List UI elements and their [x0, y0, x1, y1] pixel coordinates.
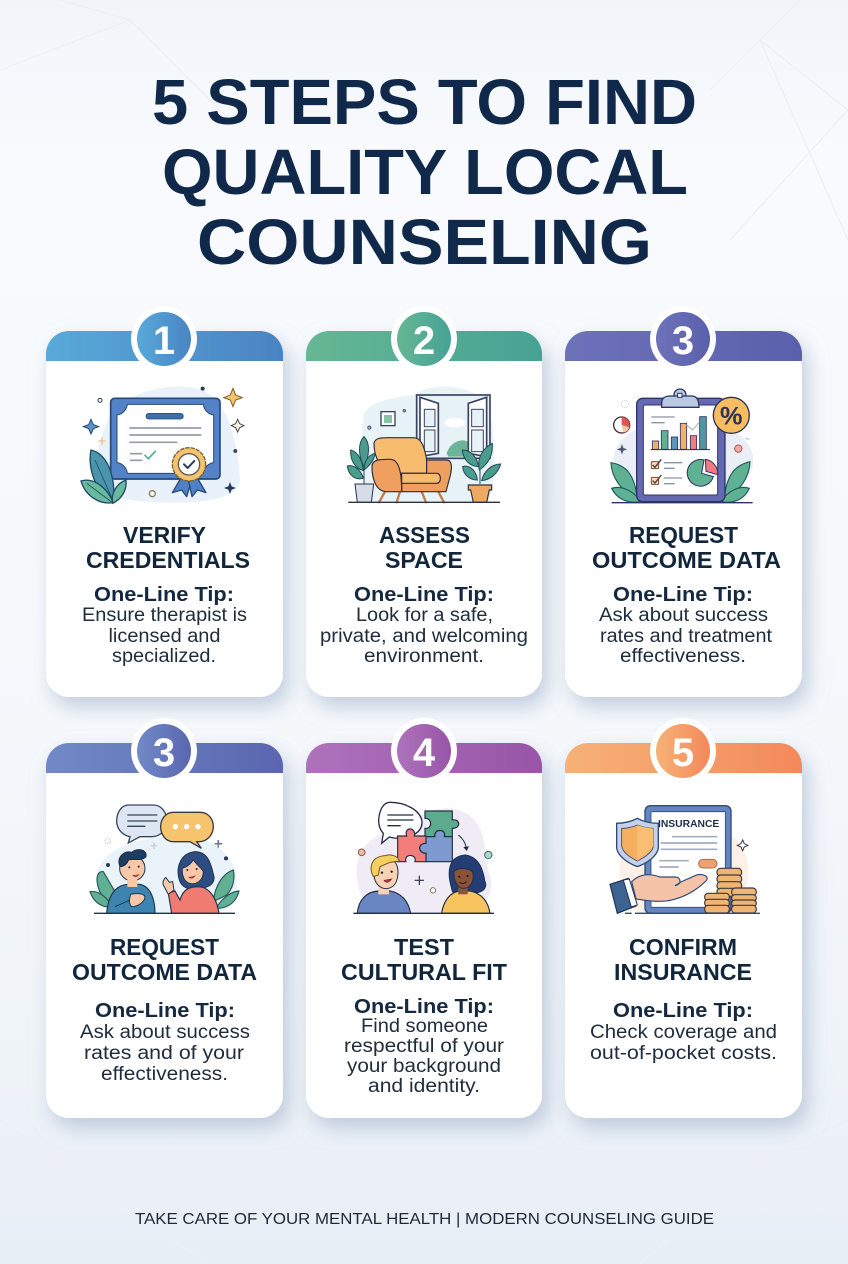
- tip text: out-of-pocket costs.: [590, 1043, 777, 1064]
- title: [152, 66, 697, 278]
- heading: [379, 522, 470, 573]
- heading: CREDENTIALS: [86, 547, 250, 573]
- tip text: Ask about success: [599, 605, 768, 626]
- icon: insurance document: [610, 806, 760, 913]
- tip text: [599, 584, 773, 667]
- number badge 2: [391, 306, 457, 372]
- title: 5 STEPS TO FIND: [152, 66, 697, 138]
- number badge 4: 4: [413, 731, 436, 775]
- heading: REQUEST: [629, 522, 738, 548]
- tip text: Find someone: [361, 1016, 488, 1037]
- heading: [86, 522, 250, 573]
- tip text: Look for a safe,: [356, 605, 493, 626]
- panel: step 1 verify credentials: [46, 306, 283, 697]
- number badge 3: [131, 718, 197, 784]
- tip text: respectful of your: [344, 1036, 505, 1057]
- number badge 4: [391, 718, 457, 784]
- footer text: TAKE CARE OF YOUR MENTAL HEALTH | MODERN COUNSELING GUIDE: [135, 1211, 714, 1228]
- heading: [341, 934, 507, 985]
- tip text: One-Line Tip:: [354, 996, 494, 1018]
- heading: OUTCOME DATA: [72, 959, 257, 985]
- icon: armchair room: [347, 386, 501, 502]
- tip text: Ask about success: [80, 1022, 250, 1043]
- card header: [565, 743, 802, 773]
- panel: step 5 confirm insurance: [565, 718, 802, 1118]
- number badge 5: [650, 718, 716, 784]
- heading: VERIFY: [123, 522, 206, 548]
- tip text: Ensure therapist is: [82, 605, 247, 626]
- tip text: private, and welcoming: [320, 626, 528, 647]
- tip text: One-Line Tip:: [94, 584, 234, 606]
- icon: two people talking: [90, 805, 239, 913]
- icon: insurance document: INSURANCE: [658, 819, 719, 830]
- tip text: [320, 584, 528, 667]
- heading: INSURANCE: [614, 959, 752, 985]
- card body: [46, 331, 283, 697]
- heading: SPACE: [385, 547, 463, 573]
- heading: TEST: [394, 934, 454, 960]
- tip text: licensed and: [108, 626, 220, 647]
- card body: [565, 331, 802, 697]
- card header: [46, 331, 283, 361]
- card body: [306, 331, 542, 697]
- card body: [46, 743, 283, 1118]
- heading: [72, 934, 257, 985]
- card header: [306, 743, 542, 773]
- number badge 3: [650, 306, 716, 372]
- tip text: One-Line Tip:: [613, 1000, 753, 1022]
- heading: CULTURAL FIT: [341, 959, 507, 985]
- tip text: effectiveness.: [620, 646, 746, 667]
- heading: OUTCOME DATA: [592, 547, 781, 573]
- tip text: environment.: [364, 646, 484, 667]
- panel: step 4 test cultural fit: [306, 718, 542, 1118]
- tip text: One-Line Tip:: [354, 584, 494, 606]
- panel: step 3 request outcome data: [565, 306, 802, 697]
- card header: [46, 743, 283, 773]
- number badge 3: 3: [153, 731, 175, 775]
- number badge 2: 2: [413, 319, 435, 363]
- tip text: [82, 584, 247, 667]
- tip text: [590, 1000, 777, 1064]
- panel: step 2 assess space: [306, 306, 542, 697]
- tip text: One-Line Tip:: [95, 1000, 235, 1022]
- number badge 1: 1: [153, 319, 175, 363]
- heading: REQUEST: [110, 934, 219, 960]
- title: QUALITY LOCAL: [162, 136, 688, 208]
- panel: step 3 duplicate request outcome data: [46, 718, 283, 1118]
- number badge 3: 3: [672, 319, 694, 363]
- tip text: One-Line Tip:: [613, 584, 753, 606]
- heading: CONFIRM: [629, 934, 737, 960]
- icon: certificate: [81, 386, 244, 503]
- tip text: and identity.: [368, 1076, 480, 1097]
- title: COUNSELING: [197, 206, 652, 278]
- icon: clipboard chart: %: [720, 402, 743, 430]
- icon: clipboard chart: [611, 389, 753, 503]
- number badge 1: [131, 306, 197, 372]
- card header: [306, 331, 542, 361]
- heading: [592, 522, 781, 573]
- heading: [614, 934, 752, 985]
- tip text: effectiveness.: [101, 1064, 228, 1085]
- card header: [565, 331, 802, 361]
- heading: ASSESS: [379, 522, 470, 548]
- icon: puzzle and two people: [353, 802, 494, 913]
- tip text: specialized.: [112, 646, 216, 667]
- card body: [306, 743, 542, 1118]
- tip text: rates and of your: [84, 1043, 245, 1064]
- tip text: Check coverage and: [590, 1022, 777, 1043]
- tip text: rates and treatment: [600, 626, 773, 647]
- tip text: your background: [347, 1056, 501, 1077]
- tip text: [344, 996, 505, 1097]
- card body: [565, 743, 802, 1118]
- tip text: [80, 1000, 250, 1085]
- number badge 5: 5: [672, 731, 694, 775]
